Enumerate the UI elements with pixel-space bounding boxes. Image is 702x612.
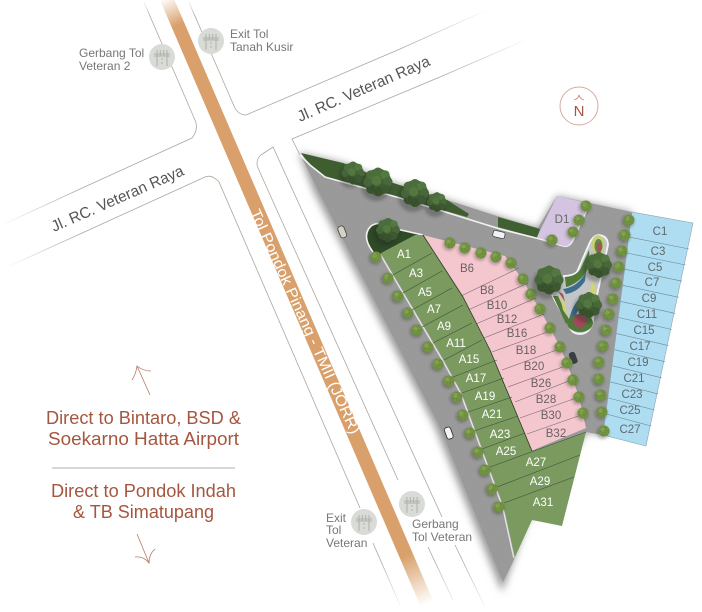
lots B, pink block: B26 bbox=[531, 378, 551, 390]
lots C, blue block: C19 bbox=[627, 357, 649, 369]
site road surface bbox=[299, 153, 632, 592]
lots C, blue block: C9 bbox=[642, 293, 656, 305]
lots A, green block: A31 bbox=[533, 497, 553, 509]
lots A, green block: A27 bbox=[526, 457, 546, 469]
lots B, pink block: B8 bbox=[480, 285, 494, 297]
lots C, blue block: C5 bbox=[648, 262, 662, 274]
toll road: Tol Pondok Pinang - TMII (JORR): Tol Pondok Pinang - TMII (JORR) bbox=[246, 207, 363, 437]
lots B, pink block: B6 bbox=[460, 263, 474, 275]
toll marker: Exit Tol Veteran: Tol bbox=[326, 523, 341, 537]
lots C, blue block: C27 bbox=[619, 424, 641, 436]
lots C, blue block: C11 bbox=[637, 309, 657, 321]
lots B, pink block: B32 bbox=[546, 428, 566, 440]
toll marker: Gerbang Tol Veteran 2: Veteran 2 bbox=[79, 59, 131, 73]
toll marker: Exit Tol Tanah Kusir bbox=[198, 27, 293, 54]
toll marker: Gerbang Tol Veteran: Gerbang bbox=[412, 517, 459, 531]
cars bbox=[337, 225, 578, 440]
lots A, green block bbox=[380, 235, 586, 558]
toll marker: Gerbang Tol Veteran bbox=[399, 491, 472, 544]
road label: Jl. RC. Veteran Raya (lower): Jl. RC. Veteran Raya bbox=[49, 162, 187, 236]
lots A, green block: A23 bbox=[490, 429, 510, 441]
direction text: Pondok Indah and TB Simatupang: & TB Simatupang bbox=[73, 502, 214, 522]
green strip along top road bbox=[300, 153, 588, 246]
direction text: Bintaro, BSD and Soekarno Hatta Airport: Direct to Bintaro, BSD & bbox=[46, 408, 241, 428]
toll marker: Exit Tol Tanah Kusir: Exit Tol bbox=[230, 27, 268, 41]
small trees along the lots bbox=[369, 200, 634, 514]
direction text: Pondok Indah and TB Simatupang: Direct to Pondok Indah bbox=[51, 481, 236, 501]
large trees bbox=[339, 162, 612, 323]
lots D1: D1 bbox=[555, 214, 569, 226]
lots A, green block: A7 bbox=[427, 304, 441, 316]
lots C, blue block: C7 bbox=[645, 277, 659, 289]
lots A, green block: A11 bbox=[446, 338, 466, 350]
toll marker: Gerbang Tol Veteran 2: Gerbang Tol bbox=[79, 46, 144, 60]
lots C, blue block bbox=[603, 212, 693, 446]
lots C, blue block: C25 bbox=[619, 405, 641, 417]
lots A, green block: A21 bbox=[482, 409, 502, 421]
lots A, green block: A9 bbox=[437, 321, 451, 333]
toll marker: Gerbang Tol Veteran: Tol Veteran bbox=[412, 530, 472, 544]
lots A, green block: A25 bbox=[496, 446, 516, 458]
lots A, green block: A17 bbox=[466, 373, 486, 385]
lots B, pink block: B28 bbox=[536, 394, 556, 406]
direction arrow: down bbox=[135, 534, 155, 563]
lots B, pink block: B10 bbox=[487, 300, 507, 312]
lots B, pink block: B12 bbox=[497, 314, 517, 326]
lots A, green block: A5 bbox=[418, 287, 432, 299]
road network outlines bbox=[0, 0, 530, 607]
lots C, blue block: C15 bbox=[633, 325, 655, 337]
lots B, pink block bbox=[423, 235, 586, 451]
direction arrow: up bbox=[132, 366, 151, 395]
site plan bbox=[299, 153, 693, 592]
direction text: Pondok Indah and TB Simatupang bbox=[51, 481, 236, 522]
direction text: Bintaro, BSD and Soekarno Hatta Airport: Soekarno Hatta Airport bbox=[48, 429, 239, 449]
direction text: Bintaro, BSD and Soekarno Hatta Airport bbox=[46, 408, 241, 449]
toll marker: Exit Tol Tanah Kusir: Tanah Kusir bbox=[230, 40, 293, 54]
toll marker: Exit Tol Veteran: Veteran bbox=[326, 536, 367, 550]
corner island at A1 bbox=[366, 223, 423, 254]
toll marker: Exit Tol Veteran bbox=[326, 509, 377, 550]
north compass: N bbox=[574, 103, 584, 120]
lots B, pink block: B20 bbox=[524, 361, 544, 373]
road label: Jl. RC. Veteran Raya (upper): Jl. RC. Veteran Raya bbox=[295, 53, 433, 126]
toll marker: Exit Tol Veteran: Exit bbox=[326, 511, 347, 525]
lots C, blue block: C3 bbox=[651, 246, 665, 258]
central park island bbox=[552, 235, 608, 334]
lots A, green block: A1 bbox=[397, 249, 411, 261]
lots A, green block: A15 bbox=[459, 354, 479, 366]
lots C, blue block: C23 bbox=[621, 389, 643, 401]
lots B, pink block: B30 bbox=[541, 410, 561, 422]
lots B, pink block: B18 bbox=[516, 345, 536, 357]
lots A, green block: A3 bbox=[409, 268, 423, 280]
lots C, blue block: C17 bbox=[629, 341, 651, 353]
lots B, pink block: B16 bbox=[507, 328, 527, 340]
lots A, green block: A29 bbox=[530, 476, 550, 488]
lots C, blue block: C1 bbox=[653, 226, 667, 238]
toll marker: Gerbang Tol Veteran 2 bbox=[79, 44, 175, 73]
lots A, green block: A19 bbox=[475, 391, 495, 403]
lots C, blue block: C21 bbox=[623, 373, 645, 385]
north compass bbox=[560, 87, 598, 125]
lots D1 bbox=[537, 196, 588, 246]
